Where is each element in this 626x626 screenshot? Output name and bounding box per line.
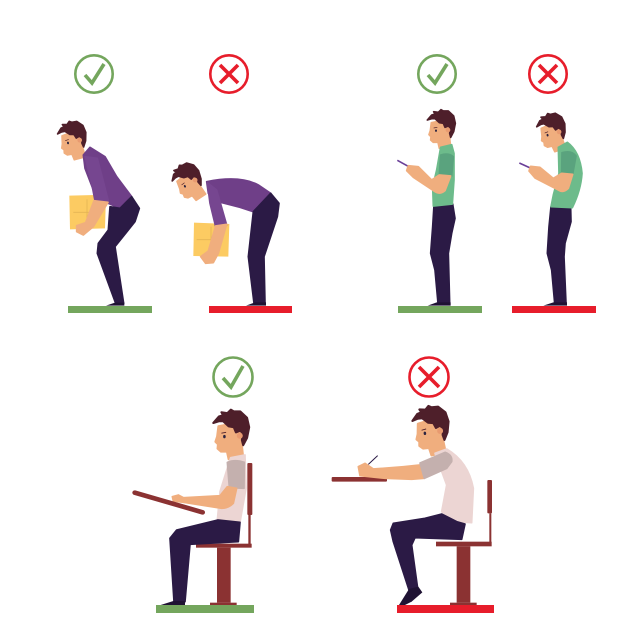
panel: sitting, incorrect: [332, 358, 494, 613]
ground bar: [68, 306, 152, 313]
ground bar: [156, 605, 254, 613]
panel: phone use, correct: [397, 55, 482, 313]
figure: man hunched over phone: [519, 110, 582, 306]
panel: lifting, incorrect: [167, 55, 292, 313]
panel: phone use, incorrect: [512, 55, 596, 313]
panel: sitting, correct: [135, 358, 254, 613]
icon: check badge: [214, 358, 252, 396]
chair: [196, 463, 252, 605]
icon: cross badge: [210, 55, 248, 93]
figure: man lifting with bent back: [167, 159, 279, 306]
ground bar: [512, 306, 596, 313]
ground bar: [209, 306, 292, 313]
icon: check badge: [418, 55, 456, 93]
ground bar: [398, 306, 482, 313]
panel: lifting, correct: [56, 55, 152, 313]
figure: man lifting with bent knees: [56, 119, 139, 306]
icon: check badge: [75, 55, 113, 93]
figure: man sitting upright on chair at tilted board: [135, 410, 252, 605]
box: [193, 223, 229, 257]
icon: cross badge: [410, 358, 448, 396]
ground bar: [397, 605, 494, 613]
desk: [332, 477, 387, 482]
figure: man standing upright with phone: [397, 110, 455, 306]
figure: man hunched at desk writing: [332, 404, 492, 605]
chair: [436, 480, 492, 605]
tilted board: [135, 493, 203, 512]
box: [69, 195, 106, 229]
icon: cross badge: [529, 55, 567, 93]
